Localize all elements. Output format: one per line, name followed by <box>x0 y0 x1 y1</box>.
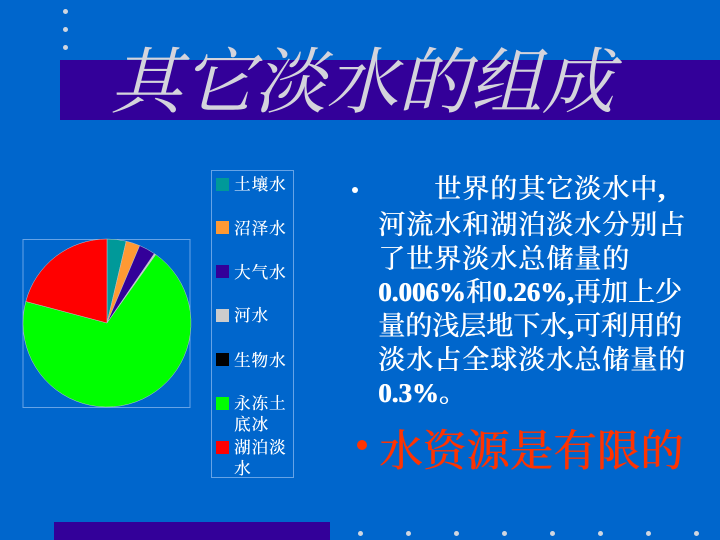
bottom band <box>54 522 330 540</box>
legend item: permafrost: 永冻土底冰 <box>234 394 286 434</box>
legend item: soil water: 土壤水 <box>234 175 286 194</box>
legend item: river water <box>216 306 269 325</box>
red conclusion: 水资源是有限的 <box>379 428 684 476</box>
legend item: biological water: 生物水 <box>234 351 286 370</box>
legend item: river water: 河水 <box>234 306 269 325</box>
bullet text block: 河流水和湖泊淡水分别占 <box>378 210 686 240</box>
bullet text block: 了世界淡水总储量的 <box>378 244 630 274</box>
plot frame <box>23 240 190 408</box>
bullet text block: 0.006%和0.26%,再加上少 <box>378 277 682 307</box>
bullet text block: 0.3%。 <box>378 378 466 408</box>
red bullet <box>357 440 367 450</box>
decoration: top dots <box>63 9 68 50</box>
pie chart <box>22 238 192 408</box>
bullet text block: 淡水占全球淡水总储量的 <box>378 345 686 375</box>
legend item: lake water: 湖泊淡水 <box>234 438 286 478</box>
bullet text block: 量的浅层地下水,可利用的 <box>378 311 682 341</box>
legend <box>211 170 294 478</box>
title: 其它淡水的组成 <box>110 24 614 128</box>
decoration: bottom dots <box>358 531 699 536</box>
legend item: atmospheric water: 大气水 <box>234 263 286 282</box>
bullet <box>352 187 358 193</box>
bullet text block <box>352 174 686 408</box>
legend item: swamp water: 沼泽水 <box>234 219 286 238</box>
title band <box>60 60 720 120</box>
bullet text block: 世界的其它淡水中, <box>434 174 666 204</box>
pie slices <box>23 239 191 407</box>
